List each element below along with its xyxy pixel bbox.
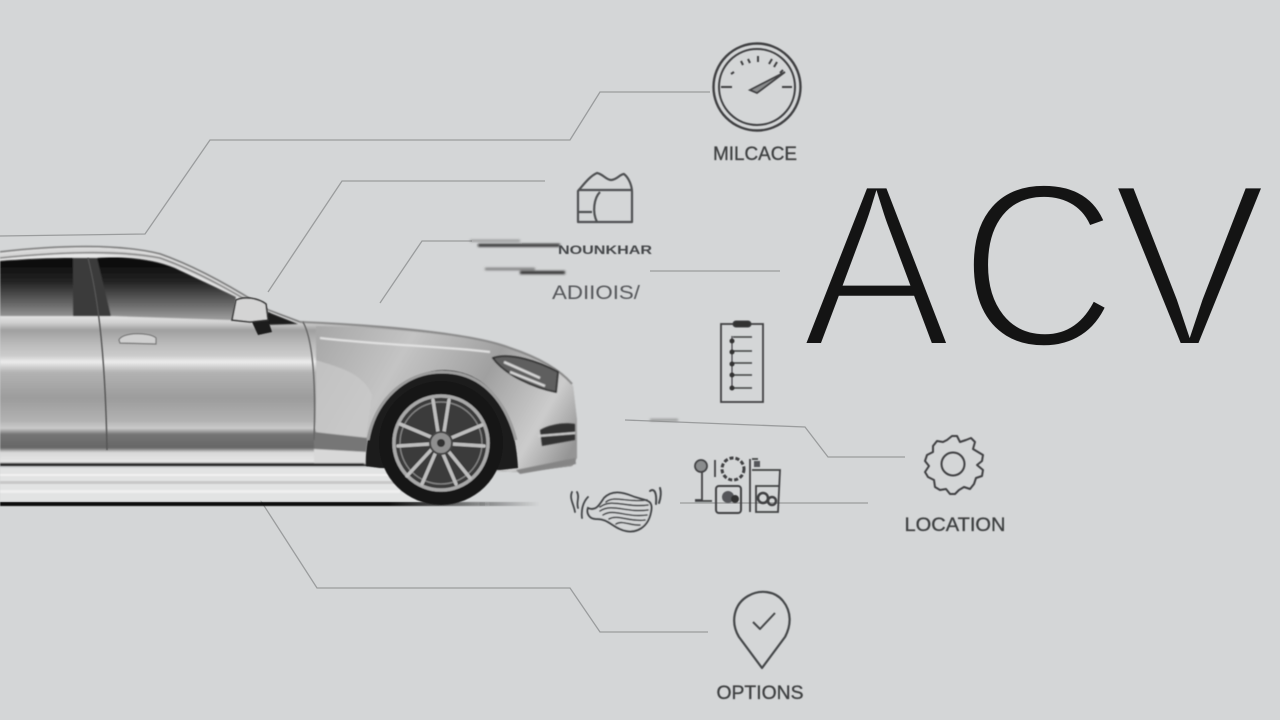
icon: cluster of parts <box>695 458 780 513</box>
title: ACV: V <box>1112 133 1267 397</box>
gauge needle <box>750 72 785 93</box>
label: options: OPTIONS <box>716 683 804 704</box>
car: ground stripes <box>0 468 540 506</box>
icon: map pin with check <box>734 592 790 668</box>
title: ACV: C <box>960 135 1117 397</box>
icon: leaf waves <box>571 488 661 531</box>
title: ACV <box>801 133 1267 397</box>
connector lines <box>0 92 905 632</box>
icon: clipboard <box>721 321 763 402</box>
label: blurred caption: NOUNKHAR <box>558 245 653 257</box>
car: headlight and grille <box>493 356 576 474</box>
car: door seams and handle <box>88 258 315 450</box>
car: body <box>0 247 577 472</box>
car: wheel <box>366 370 518 505</box>
car: side mirror <box>232 298 272 335</box>
gauge ticks <box>721 56 792 87</box>
car <box>0 247 577 506</box>
label: mileage: MILCACE <box>713 144 797 165</box>
car: windows <box>0 257 298 325</box>
icon: document folder <box>578 173 632 222</box>
label: location: LOCATION <box>904 515 1006 536</box>
icon: gauge <box>714 44 800 130</box>
icon: gear <box>925 436 983 494</box>
blurred streak lines <box>470 240 678 421</box>
label: additional: ADIIOIS/ <box>552 283 641 304</box>
title: ACV: A <box>801 133 952 396</box>
